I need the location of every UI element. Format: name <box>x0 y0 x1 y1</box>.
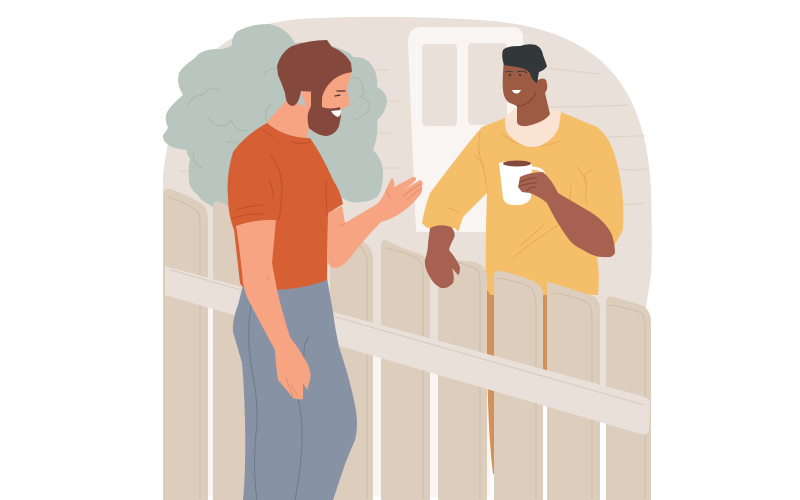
man 1: t-shirt <box>228 123 343 290</box>
mug <box>499 160 544 205</box>
plank 5 <box>438 258 487 500</box>
man 1: head <box>277 40 352 136</box>
lower wall gap strip <box>163 290 660 500</box>
man 1: raised arm and hand <box>328 177 423 268</box>
fence rail <box>165 266 650 434</box>
man 1: beard <box>308 90 341 136</box>
plank 1 <box>163 189 208 500</box>
man 1: face <box>305 70 352 125</box>
plank 2 <box>213 201 250 500</box>
man 1: hanging arm and hand <box>236 220 311 399</box>
man 2: forearm and hand holding mug <box>518 172 615 257</box>
man 1: ear <box>301 91 312 108</box>
man 2: hand resting on fence <box>425 225 460 288</box>
man 2: sweater <box>422 112 623 295</box>
window pane left <box>422 44 457 126</box>
man 1: eye and brow <box>335 91 345 96</box>
man 2: trousers <box>487 290 548 474</box>
man 1: neck <box>264 100 315 142</box>
man 2: smile <box>512 90 521 94</box>
plank 3 <box>330 230 373 500</box>
man 1: mouth <box>331 110 341 117</box>
house wall <box>163 17 652 410</box>
plank 4 <box>381 240 430 500</box>
man 1: trousers <box>233 278 357 500</box>
fence <box>163 189 651 500</box>
man 1: hair <box>277 40 352 106</box>
plank 6 <box>494 271 543 500</box>
window <box>408 27 523 232</box>
man 2: head and neck <box>502 44 550 126</box>
plank 7 <box>547 282 600 500</box>
man 2: eyes and brows <box>505 71 527 76</box>
man 2: hair <box>502 44 547 83</box>
man 2: collar <box>505 108 561 147</box>
window pane right <box>468 43 507 125</box>
bush <box>163 24 387 215</box>
plank 8 <box>606 297 651 500</box>
